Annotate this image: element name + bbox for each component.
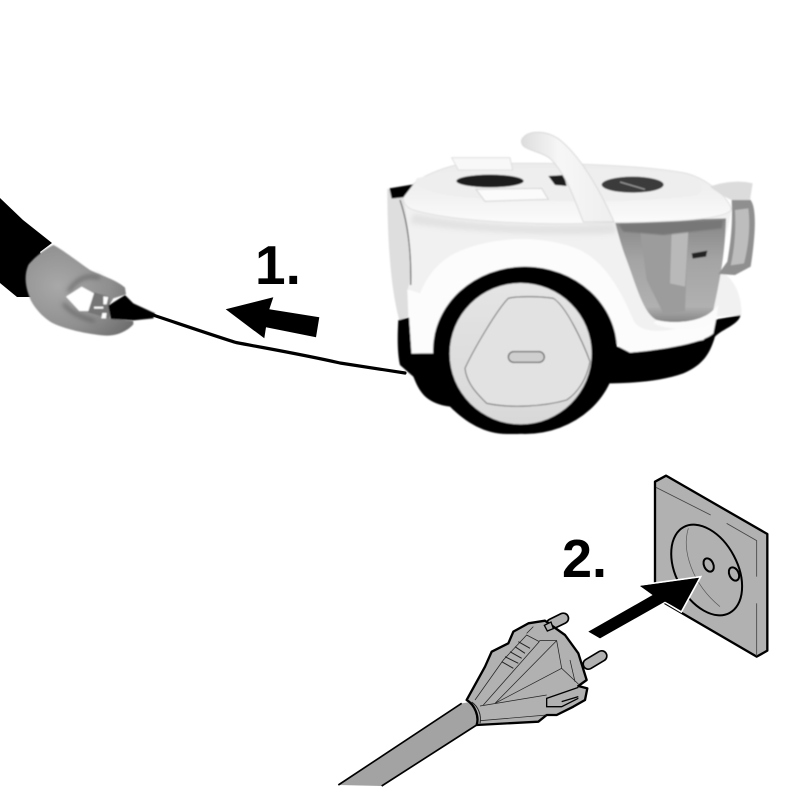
dark interior top — [618, 220, 723, 235]
sleeve — [0, 198, 52, 297]
lid inner ridge — [416, 168, 702, 201]
plug earth clip — [547, 687, 578, 707]
plug facets — [475, 627, 578, 721]
socket inner rim — [686, 528, 720, 607]
black corner latch — [389, 184, 413, 199]
container lower lip — [653, 305, 718, 329]
carry handle — [521, 132, 614, 222]
socket plate silhouette — [655, 476, 767, 657]
plug in hand — [108, 295, 155, 320]
hand — [26, 245, 133, 336]
wheel badge — [508, 352, 544, 362]
plug body — [467, 621, 587, 725]
electric plug and cable — [338, 618, 602, 786]
plug top tab — [544, 622, 553, 631]
socket hole right — [727, 566, 741, 582]
step number 1: 1. — [255, 234, 301, 296]
rear pin — [552, 618, 563, 624]
vacuum cleaner — [387, 132, 755, 434]
lid button front — [476, 188, 548, 201]
fingers behind plug — [88, 292, 110, 318]
lid opening middle — [548, 175, 567, 186]
under-lid shadow — [410, 213, 617, 235]
vacuum black base — [398, 315, 741, 434]
vacuum wheel — [450, 283, 592, 424]
vacuum wheel arch — [433, 267, 617, 434]
arrow 1 pointing left — [226, 297, 319, 338]
gap between thumb and finger — [66, 287, 94, 311]
plug pins — [94, 305, 103, 311]
seam between rear panel and body — [400, 200, 411, 285]
person's hand holding the plug — [0, 198, 155, 336]
dust container — [615, 218, 726, 322]
socket plate bevel lines — [656, 487, 757, 656]
lid button rear — [452, 158, 513, 170]
vacuum rear panel — [387, 188, 411, 320]
water jug body — [718, 199, 755, 275]
water jug window — [731, 208, 749, 265]
lid opening left — [456, 175, 524, 187]
power cord — [150, 314, 405, 373]
step number 2: 2. — [562, 529, 607, 589]
front pin — [588, 656, 602, 664]
socket recess — [657, 513, 757, 627]
wheel hub cap — [465, 297, 590, 406]
lid opening right — [602, 177, 664, 193]
dust container inner tube — [640, 228, 688, 313]
vacuum wheel fender — [407, 239, 717, 353]
cable — [338, 700, 490, 786]
hand creases — [63, 277, 100, 321]
vacuum body shell — [403, 200, 742, 353]
container marking — [692, 251, 707, 259]
water jug cap — [710, 182, 753, 200]
plug strain collar — [472, 702, 480, 723]
arrow 2 pointing to socket — [587, 577, 701, 639]
wall socket — [655, 476, 767, 657]
socket hole left — [701, 557, 716, 573]
lid — [403, 163, 732, 224]
plug grip ridges — [502, 642, 530, 668]
